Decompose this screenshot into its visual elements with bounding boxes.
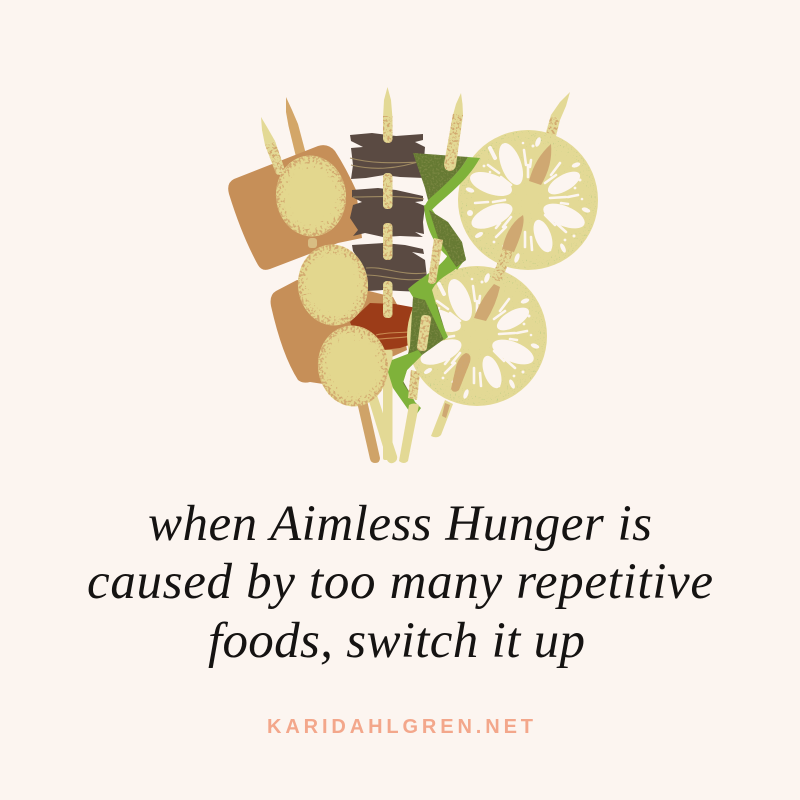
food: dark strip bottom	[352, 243, 427, 292]
stick: dark skewer tip	[383, 87, 392, 143]
stick: dark skewer segment three	[383, 281, 392, 318]
skewer group: bottom sticks	[357, 350, 397, 463]
stick: dark skewer segment two	[383, 223, 392, 260]
stick: ribbon skewer middle stub	[408, 370, 420, 400]
stick: tan skewer bottom	[357, 400, 380, 463]
headline line two: caused by too many repetitive	[87, 554, 713, 610]
stick: middle lotus tan section	[502, 215, 524, 252]
stick: upper lotus tan section	[529, 144, 551, 185]
skewer group: round dumplings	[261, 117, 392, 410]
stick: pale skewer tip	[261, 117, 285, 175]
headline	[87, 496, 713, 669]
skewer group: lotus slices	[407, 92, 598, 437]
food: dark strip grain lines	[350, 158, 426, 280]
skewer group: dark strips and red meat	[350, 87, 427, 350]
footer: website: KARIDAHLGREN.NET	[267, 716, 533, 738]
stick: ribbon skewer upper segment	[428, 238, 443, 284]
food: bright ribbon connecting strip	[424, 205, 466, 270]
stick: lotus skewer bottom	[431, 400, 453, 437]
food: bright ribbon top band	[424, 157, 480, 212]
stick: ribbon skewer bottom	[399, 404, 419, 463]
food: olive ribbon lower fold	[401, 296, 447, 402]
food: round dumpling one	[272, 152, 350, 240]
food: dark strip middle	[350, 188, 425, 237]
food: olive ribbon middle fold	[429, 210, 466, 268]
stick: tan skewer tip	[286, 97, 307, 161]
skewer group: tan squares	[228, 97, 407, 385]
food: lower tan square	[271, 280, 407, 385]
headline line one: when Aimless Hunger is	[148, 496, 652, 552]
stick: lotus skewer bottom tan accent	[442, 403, 450, 418]
stick: ribbon skewer tip	[444, 93, 463, 171]
food: round dumpling two	[294, 241, 372, 329]
stick: lotus skewer tip	[545, 92, 570, 140]
stick: nub between dumplings	[308, 238, 317, 248]
food: bright ribbon bottom	[388, 350, 422, 418]
food: lotus slice lower	[407, 266, 547, 406]
stick: pale skewer bottom	[368, 395, 397, 463]
food: upper tan square	[228, 145, 362, 270]
food: olive ribbon top fold	[413, 153, 468, 200]
stick: ribbon skewer short segment	[417, 314, 431, 352]
stick: lower lotus upper section	[474, 284, 500, 321]
food: red meat	[350, 303, 420, 350]
stick: dark skewer bottom	[383, 350, 392, 460]
skewer group: green ribbon	[388, 93, 480, 463]
food: dark strip top	[350, 133, 425, 179]
food: lotus slice upper	[458, 130, 598, 270]
stick: dark skewer segment one	[383, 173, 392, 209]
headline line three: foods, switch it up	[208, 613, 585, 669]
food: red meat grain lines	[372, 330, 420, 340]
food: bright ribbon lower diamond	[408, 255, 457, 340]
stick: link between lotus slices	[491, 249, 513, 282]
food: round dumpling three	[314, 322, 392, 410]
illustration: food skewers	[228, 87, 598, 463]
stick: lower lotus lower section	[451, 353, 470, 392]
